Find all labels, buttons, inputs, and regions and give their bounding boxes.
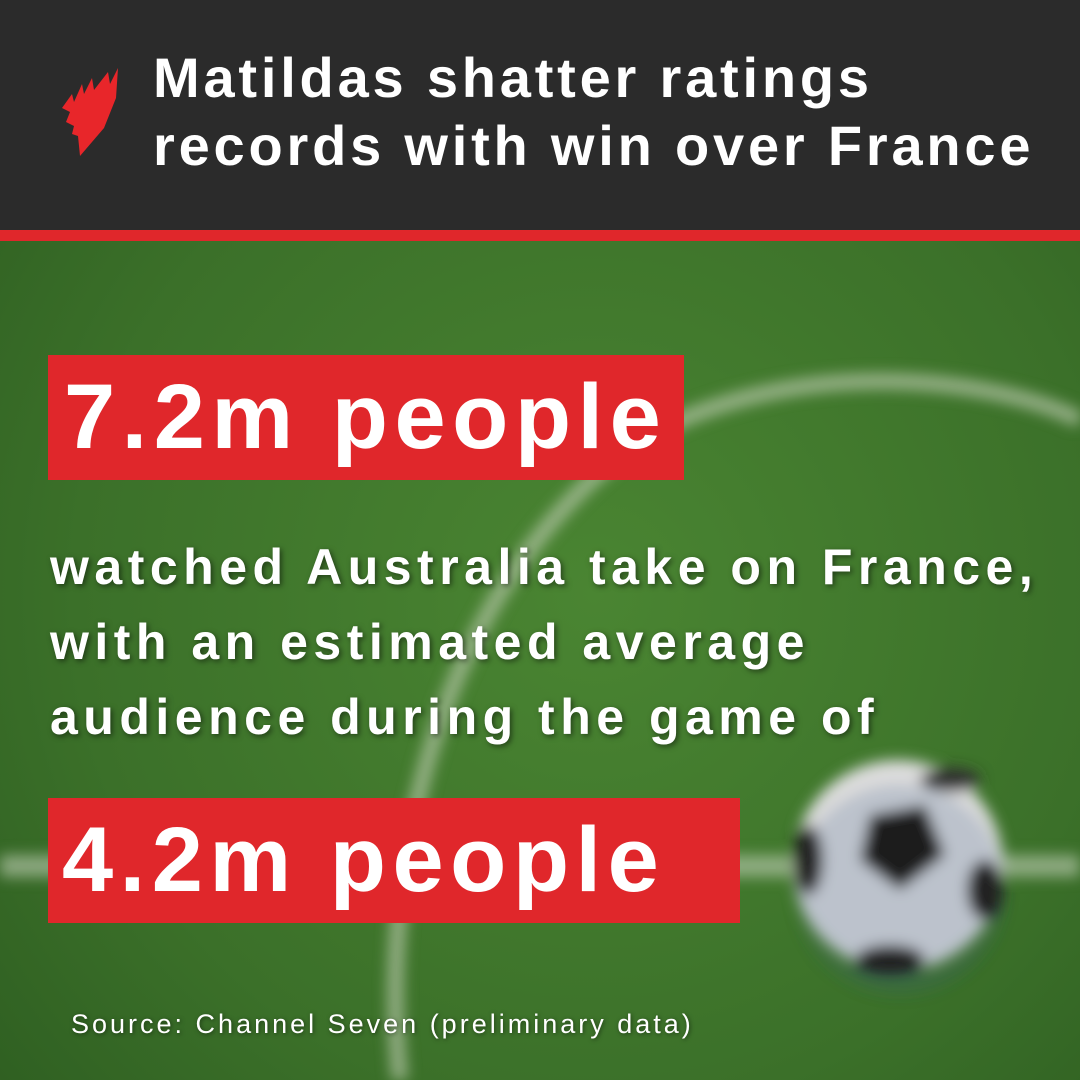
stat box: 7.2m people: 7.2m people — [64, 366, 667, 468]
source note: Source: Channel Seven (preliminary data) — [71, 1009, 694, 1039]
title: Matildas shatter ratings — [153, 46, 873, 109]
stat box: 4.2m people: 4.2m people — [62, 809, 665, 911]
title: records with win over France — [153, 114, 1034, 177]
red divider — [0, 230, 1080, 241]
body text: audience during the game of — [50, 689, 879, 745]
body text — [50, 539, 1038, 750]
title — [153, 46, 1034, 177]
header bar — [0, 0, 1080, 230]
body text: with an estimated average — [50, 614, 810, 670]
icon: SBS logo — [62, 68, 118, 156]
body text: watched Australia take on France, — [50, 539, 1038, 595]
